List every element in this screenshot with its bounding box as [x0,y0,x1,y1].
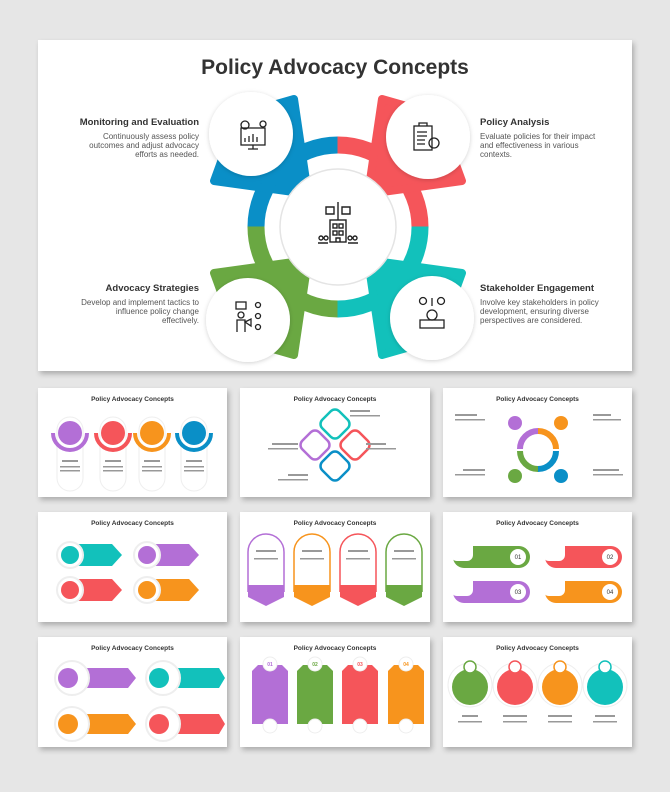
text: stakeholder engagement: Stakeholder Engagement [480,283,594,294]
thumbnail 5: arch cards [240,512,430,622]
thumbnail 8: tag cards: 01 [267,662,273,668]
text: stakeholder engagement [480,283,599,325]
text: monitoring and evaluation [80,117,199,159]
text: monitoring and evaluation: Continuously assess policy outcomes and adjust advocacy efforts as needed. [89,132,199,159]
thumbnail 4: leaves: Policy Advocacy Concepts [91,520,174,527]
icon: center building megaphone [318,202,358,243]
icon: stakeholders gear [420,298,444,328]
thumbnail 9: circle pins: Policy Advocacy Concepts [496,645,579,652]
text: advocacy strategies [81,283,199,325]
thumbnail 1: circles with arcs: Policy Advocacy Concepts [91,396,174,403]
thumbnail 7: arrows [38,637,227,747]
thumbnail 8: tag cards: 03 [357,662,363,668]
thumbnail 3: ring: Policy Advocacy Concepts [496,396,579,403]
wheel diagram [204,91,476,365]
thumbnail 6: pill bars [443,512,632,622]
text: stakeholder engagement: Involve key stakeholders in policy development, ensuring diverse perspectives are considered. [480,298,599,325]
thumbnail 7: arrows: Policy Advocacy Concepts [91,645,174,652]
thumbnail 8: tag cards: 02 [312,662,318,668]
thumbnail 5: arch cards: Policy Advocacy Concepts [294,520,377,527]
thumbnail 8: tag cards [240,637,430,747]
thumbnail 6: pill bars: 03 [515,590,522,596]
icon: monitor chart [241,121,266,149]
text: policy analysis: Policy Analysis [480,117,549,128]
ring segments [206,92,474,362]
text: advocacy strategies: Develop and implement tactics to influence policy change effectively. [81,298,199,325]
thumbnail 6: pill bars: 04 [607,590,614,596]
thumbnail 2: diamonds [240,388,430,497]
text: advocacy strategies: Advocacy Strategies [106,283,199,294]
thumbnail 3: ring [443,388,632,497]
main slide [38,40,632,371]
thumbnail 6: pill bars: 01 [515,555,522,561]
thumbnail 8: tag cards: 04 [403,662,409,668]
thumbnail 6: pill bars: Policy Advocacy Concepts [496,520,579,527]
thumbnail 9: circle pins [443,637,632,747]
icon: clipboard [414,123,439,150]
text: monitoring and evaluation: Monitoring and Evaluation [80,117,199,128]
icon: presenter [236,302,260,332]
thumbnail 2: diamonds: Policy Advocacy Concepts [294,396,377,403]
thumbnail 8: tag cards: Policy Advocacy Concepts [294,645,377,652]
thumbnail 6: pill bars: 02 [607,555,614,561]
thumbnail 1: circles with arcs [38,388,227,497]
text: policy analysis: Evaluate policies for their impact and effectiveness in various contexts. [480,132,595,159]
thumbnail 4: leaves [38,512,227,622]
text: policy analysis [480,117,596,159]
title: Policy Advocacy Concepts [201,56,469,79]
